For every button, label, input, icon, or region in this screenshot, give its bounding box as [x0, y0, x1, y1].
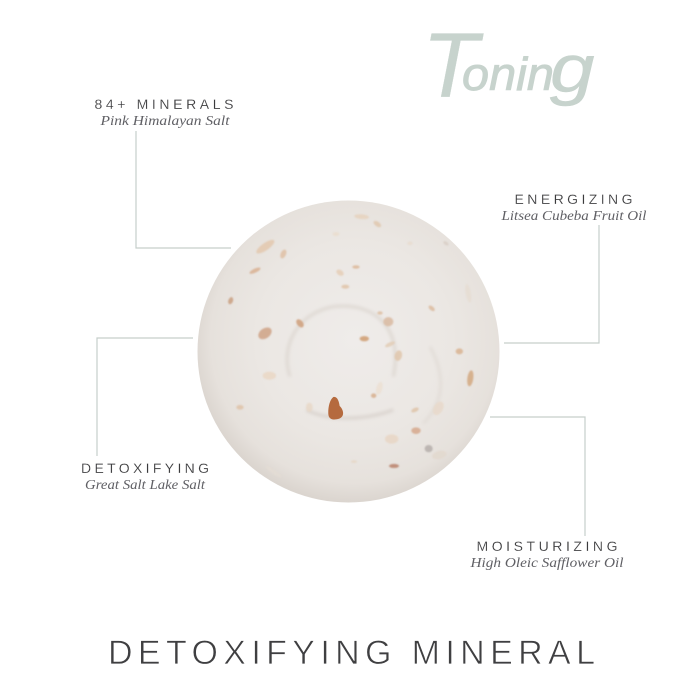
callout subtitle: Pink Himalayan Salt [99, 113, 231, 128]
callout heading: 84+ MINERALS [94, 96, 234, 112]
callout: 84+ minerals [94, 96, 234, 248]
large pink salt crystal [328, 397, 343, 420]
title: Toning: T [422, 15, 484, 117]
salt flecks [227, 214, 474, 479]
title: Toning [422, 15, 594, 117]
leader line [97, 338, 193, 456]
leader line [490, 417, 585, 536]
leader line [136, 131, 231, 248]
callout subtitle: Great Salt Lake Salt [85, 477, 206, 492]
callout heading: MOISTURIZING [476, 538, 618, 554]
callout subtitle: High Oleic Safflower Oil [469, 555, 624, 570]
callout: energizing [500, 191, 647, 343]
bottom heading: DETOXIFYING MINERAL [108, 634, 595, 672]
callout subtitle: Litsea Cubeba Fruit Oil [500, 208, 647, 223]
title: Toning: onin [462, 48, 554, 100]
bath bomb sphere [198, 200, 500, 502]
title: Toning: g [550, 31, 594, 107]
leader line [504, 225, 599, 343]
callout: moisturizing [469, 417, 624, 570]
callout heading: DETOXIFYING [81, 460, 209, 476]
callout: detoxifying [81, 338, 209, 492]
pressed ring detail [287, 306, 441, 423]
callout heading: ENERGIZING [514, 191, 632, 207]
